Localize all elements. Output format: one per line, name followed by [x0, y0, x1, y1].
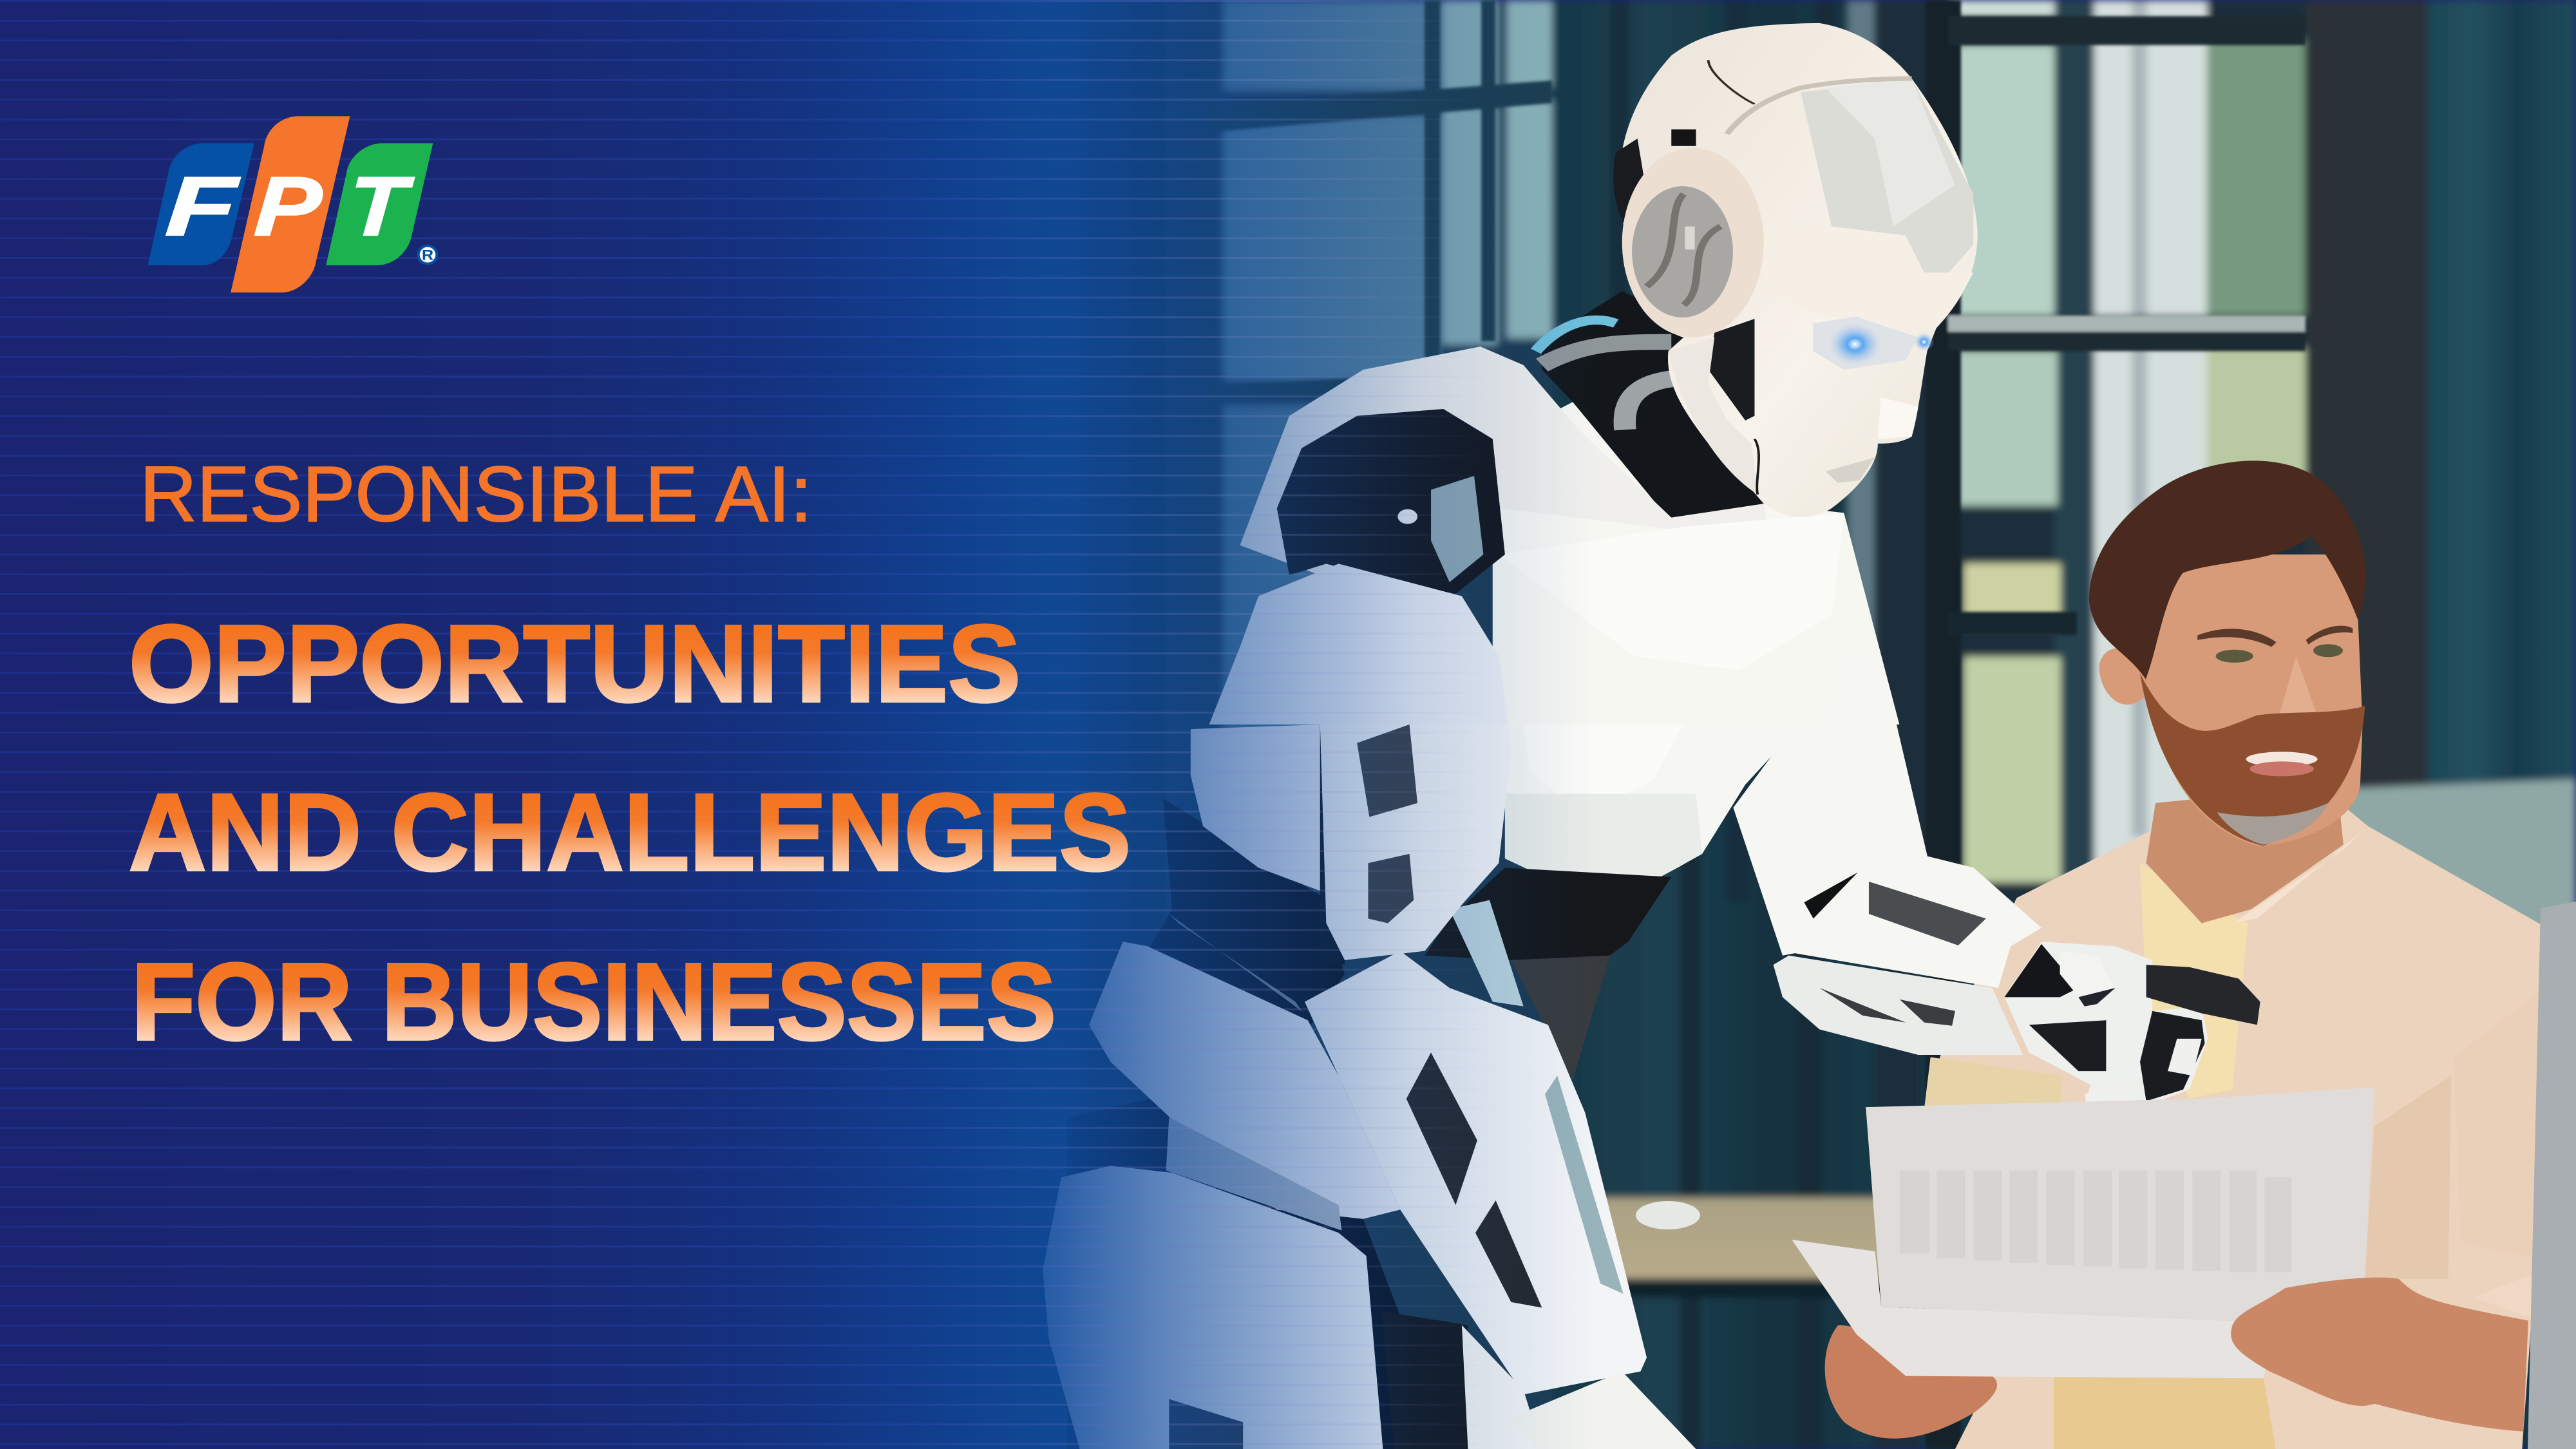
- title: [129, 603, 1131, 1063]
- monitor edge: [2528, 902, 2576, 1449]
- logo: FPT: [148, 116, 438, 292]
- man: beard and mouth: [2140, 674, 2365, 846]
- chart bars on the paper: [1900, 1170, 2291, 1272]
- logo: green tile: T: [346, 160, 415, 253]
- logo: registered mark: [417, 245, 438, 265]
- window frame bars: [1211, 0, 2306, 1449]
- logo: orange tile: P: [252, 160, 325, 253]
- title line 3: FOR BUSINESSES: [131, 941, 1056, 1063]
- background scan lines: [0, 0, 1444, 1445]
- man: head and hair: [2089, 460, 2366, 846]
- robot: neck and cables: [1536, 291, 1764, 527]
- logo: registered mark: R: [422, 248, 433, 263]
- document papers and man's hands: [1792, 1087, 2528, 1439]
- subtitle: RESPONSIBLE AI:: [140, 450, 812, 538]
- robot: abdomen and mid section: [1425, 724, 1801, 1080]
- title line 2: AND CHALLENGES: [129, 772, 1131, 894]
- man: left hand: [1825, 1325, 1997, 1439]
- robot: black shoulder joint: [1277, 409, 1505, 594]
- robot: [1043, 23, 2260, 1449]
- front paper: [1866, 1087, 2374, 1323]
- robot: upper arm: [1209, 564, 1508, 724]
- logo: blue tile: [148, 143, 254, 265]
- man: shirt and torso: [1918, 784, 2552, 1449]
- robot: forearm plate with vents: [1305, 951, 1696, 1449]
- robot: hand: [2004, 942, 2260, 1106]
- logo: blue tile: F: [164, 160, 242, 253]
- computer mouse on table: [1636, 1201, 1700, 1229]
- title line 1: OPPORTUNITIES: [129, 603, 1021, 725]
- logo: green tile: [326, 143, 433, 265]
- robot: lower body and leg plates: [1043, 724, 1542, 1449]
- robot: right arm: [1733, 724, 2041, 1055]
- back paper: [1792, 1240, 2278, 1378]
- man: right hand and forearm: [2231, 1278, 2528, 1432]
- robot: torso: [1240, 346, 1899, 724]
- robot: head: [1613, 23, 1978, 517]
- logo: orange tile: [231, 116, 350, 292]
- robot: upper arm lower half with vents: [1320, 724, 1511, 960]
- man: [1918, 460, 2552, 1449]
